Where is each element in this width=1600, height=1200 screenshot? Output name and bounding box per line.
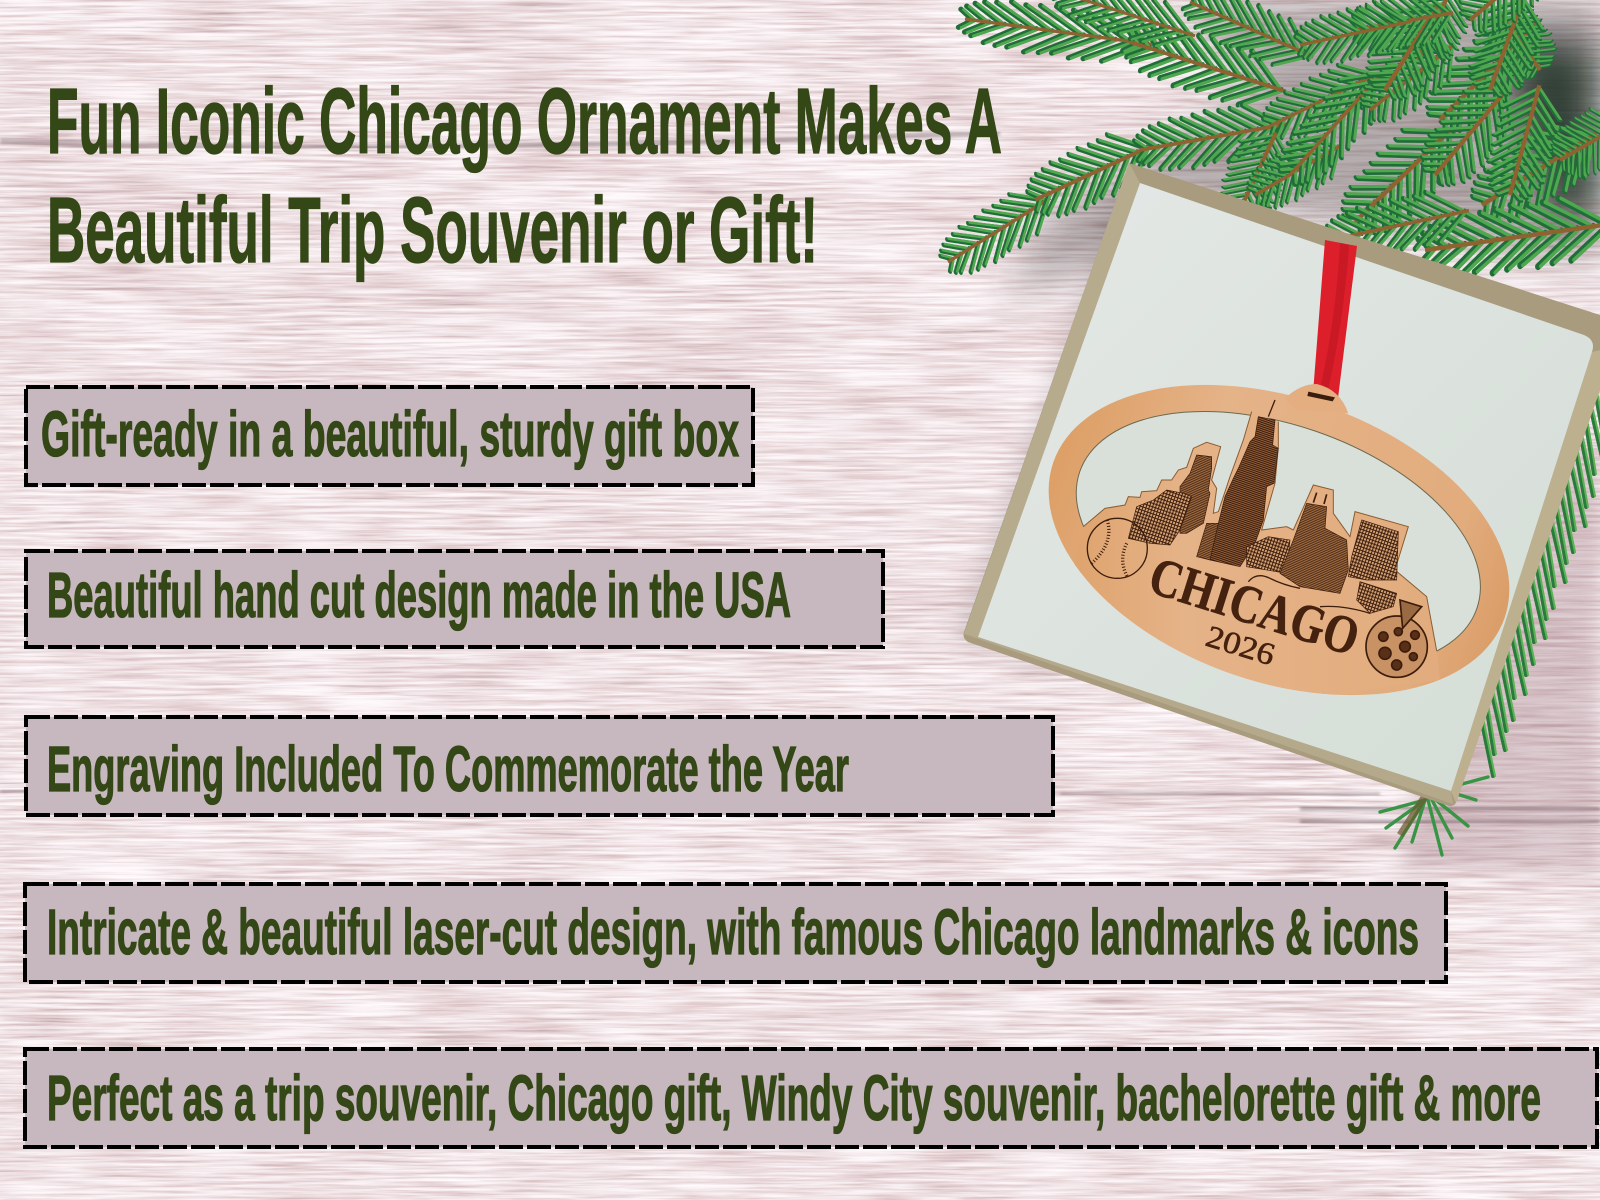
baseball [1087,518,1147,578]
gift box [955,163,1600,806]
feature 3 [26,717,1053,815]
pizza [1366,600,1427,677]
title [47,69,1002,282]
shadow under pine branches [1010,0,1600,300]
ribbon [1313,240,1357,398]
feature 2 [26,551,883,647]
engraved year: 2026 [1202,618,1279,672]
box bottom wall [964,634,1453,804]
skyline outline [1083,412,1437,651]
box left wall [964,163,1140,637]
ornament body [1007,328,1551,752]
box outer walls [964,163,1600,806]
feature 1: Gift-ready in a beautiful, sturdy gift box [41,398,739,470]
feature 1 [26,387,753,485]
pine branch, lower right [1380,396,1600,855]
cut-out opening [1042,363,1514,717]
feature 4 [25,884,1446,982]
slot [1307,392,1335,401]
feature 3: Engraving Included To Commemorate the Year [47,733,849,805]
skyline engraving [1128,400,1398,613]
hanging tab [1285,384,1348,413]
engraved word: CHICAGO [1142,545,1366,667]
wooden ornament [1048,384,1510,696]
title: Beautiful Trip Souvenir or Gift! [47,178,818,282]
white foam pad [978,183,1593,791]
box right wall [1451,350,1600,803]
wood skyline silhouette [1063,412,1440,700]
pine branches, top right [932,0,1600,285]
box drop shadow [955,185,1130,700]
feature 2: Beautiful hand cut design made in the USA [47,559,791,631]
